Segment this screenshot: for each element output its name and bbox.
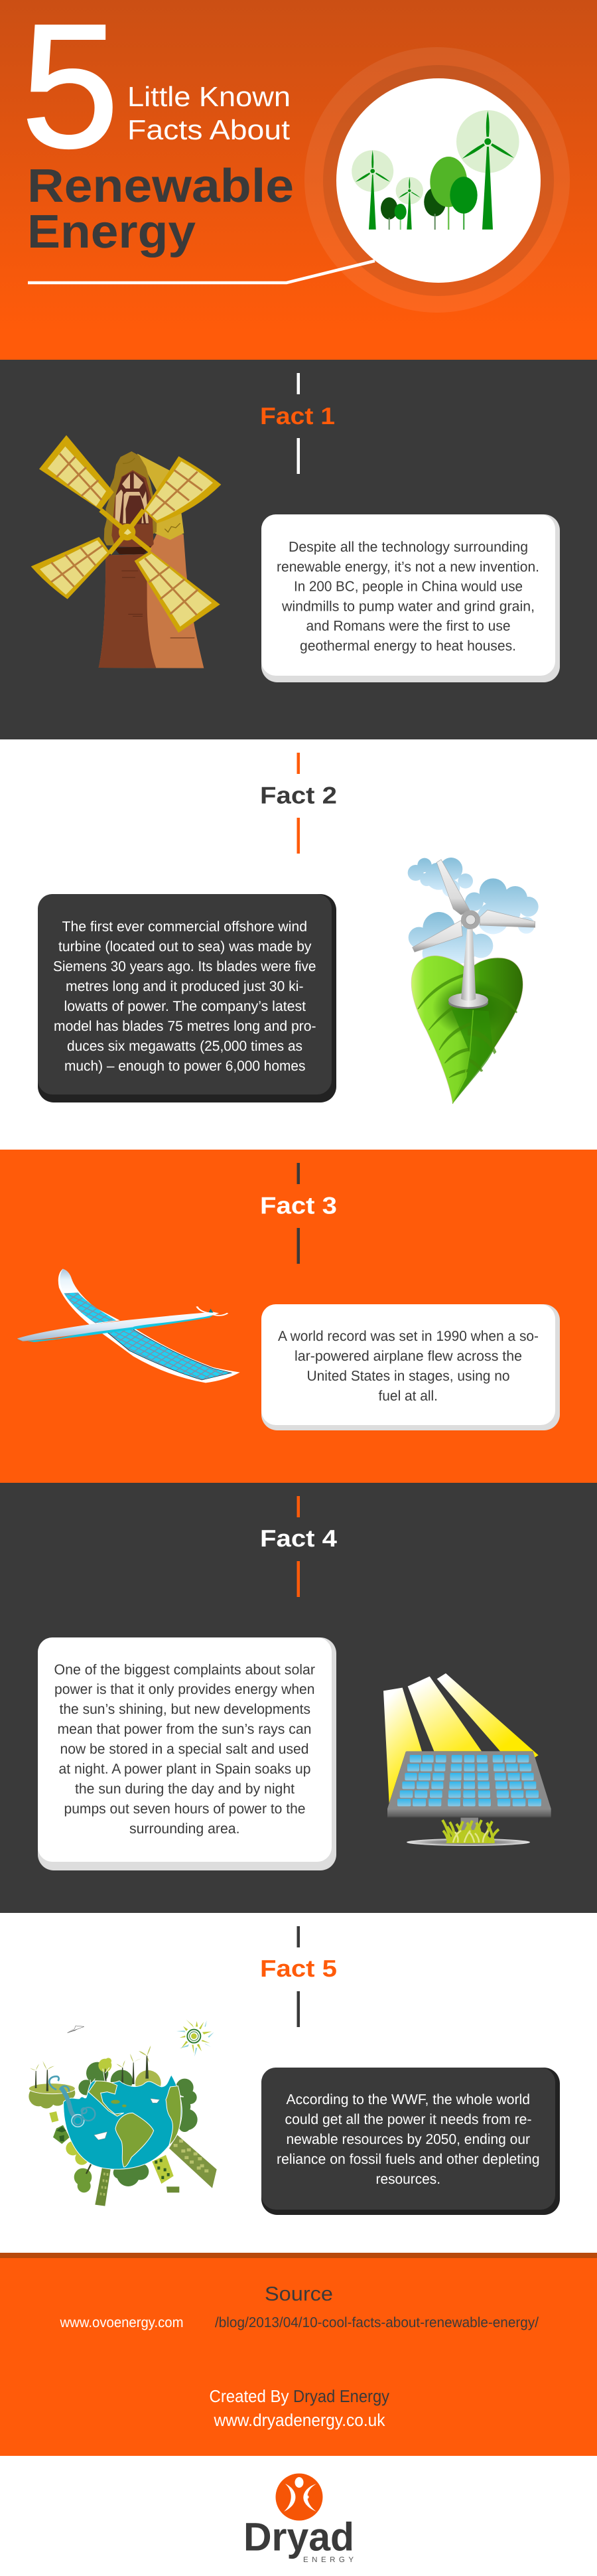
text card: fact 1: In 200 BC, people in China would use [294,579,523,595]
heading: Fact 3: Fact 3 [260,1192,337,1219]
text card: fact 3: A world record was set in 1990 when a so- [278,1328,539,1344]
title line: Energy: Energy [27,206,196,258]
text card: fact 2: The first ever commercial offshore wind [62,919,307,935]
wordmark: ENERGY: ENERGY [303,2556,354,2564]
icon: wind turbine on leaf [408,858,539,1104]
text card: fact 4: power is that it only provides energy when [54,1681,314,1697]
text card: fact 1: renewable energy, it’s not a new invention. [277,559,539,575]
icon: white circle [336,78,541,283]
text card: fact 3: lar-powered airplane flew across the [295,1348,522,1364]
panel: fact 1 [0,360,597,739]
text card: fact 1: windmills to pump water and grind grain, [281,599,535,615]
heading rule bottom [297,1561,300,1597]
text card: fact 3 [261,1304,560,1430]
text card: fact 5: newable resources by 2050, ending our [287,2131,530,2147]
text card: fact 5: According to the WWF, the whole world [287,2091,530,2107]
icon: turbines and trees [352,110,519,230]
icon: outer light ring [304,47,570,313]
panel: fact 2 [0,739,597,1150]
panel: fact 5 [0,1913,597,2253]
text card: fact 4: surrounding area. [129,1821,240,1837]
heading: Source: Source [265,2283,333,2305]
text card: fact 4: pumps out seven hours of power to the [64,1801,305,1817]
text card: fact 4: at night. A power plant in Spain soaks up [58,1761,311,1777]
panel: fact 3 [0,1150,597,1483]
text card: fact 4: now be stored in a special salt and used [60,1741,309,1757]
text card: fact 1: Despite all the technology surrounding [289,539,528,555]
heading rule bottom [297,1991,300,2027]
panel: logo [0,2456,597,2576]
text card: fact 2: turbine (located out to sea) was made by [58,939,312,954]
text card: fact 4: One of the biggest complaints about solar [54,1662,315,1678]
text card: fact 1: geothermal energy to heat houses. [300,638,516,654]
icon: Dryad emblem [276,2473,322,2521]
icon: solar panel with sun rays [383,1673,551,1846]
source domain: www.ovoenergy.com [60,2314,183,2330]
credit: Dryad Energy: Dryad Energy [293,2386,389,2406]
text card: fact 1: and Romans were the first to use [306,618,511,634]
title line: Renewable: Renewable [27,160,294,212]
heading: Fact 2: Fact 2 [260,782,337,808]
text card: fact 4: the sun during the day and by night [75,1781,295,1797]
text card: fact 2: model has blades 75 metres long and pro- [54,1018,316,1034]
icon: solar airplane [17,1269,240,1383]
panel: source and credits [0,2253,597,2456]
text card: fact 2: much) – enough to power 6,000 homes [64,1058,305,1074]
text card: fact 2: metres long and it produced just 30 ki- [66,978,304,994]
title underline with pointer [28,261,375,283]
icon: green earth [29,2020,217,2206]
panel: fact 4 [0,1483,597,1913]
text card: fact 1 [261,514,560,682]
text card: fact 3: fuel at all. [378,1388,438,1404]
text card: fact 5: resources. [375,2171,440,2187]
heading rule top [297,753,300,774]
text card: fact 5: could get all the power it needs from re- [285,2111,532,2127]
heading rule top [297,1496,300,1517]
heading: Fact 4: Fact 4 [260,1525,337,1552]
title line: Facts About: Facts About [127,114,290,145]
text card: fact 5 [261,2068,560,2215]
credit: created by: Created By [210,2386,289,2406]
text card: fact 4: mean that power from the sun’s rays can [57,1721,312,1737]
heading: Fact 5: Fact 5 [260,1955,337,1982]
text card: fact 5: reliance on fossil fuels and other depleting [277,2151,540,2167]
source path: /blog/2013/04/10-cool-facts-about-renewable-energy/ [215,2314,539,2330]
credit: website: www.dryadenergy.co.uk [214,2410,385,2430]
heading rule top [297,1926,300,1947]
text card: fact 2: Siemens 30 years ago. Its blades were five [53,958,316,974]
heading rule bottom [297,1228,300,1264]
panel: header [0,0,597,360]
text card: fact 4 [38,1637,336,1870]
icon: windmill [31,435,221,668]
text card: fact 2 [38,894,336,1102]
text card: fact 4: the sun’s shining, but new developments [60,1701,310,1717]
icon: inner dark ring [323,65,554,296]
text card: fact 2: duces six megawatts (25,000 times as [67,1038,302,1054]
heading rule top [297,373,300,394]
text card: fact 2: lowatts of power. The company’s latest [64,998,306,1014]
text card: fact 3: United States in stages, using no [306,1368,510,1384]
heading rule top [297,1163,300,1184]
title line: Little Known: Little Known [127,81,291,112]
heading rule bottom [297,438,300,474]
heading: Fact 1: Fact 1 [260,402,335,429]
heading rule bottom [297,818,300,854]
wordmark: Dryad: Dryad [243,2514,354,2559]
